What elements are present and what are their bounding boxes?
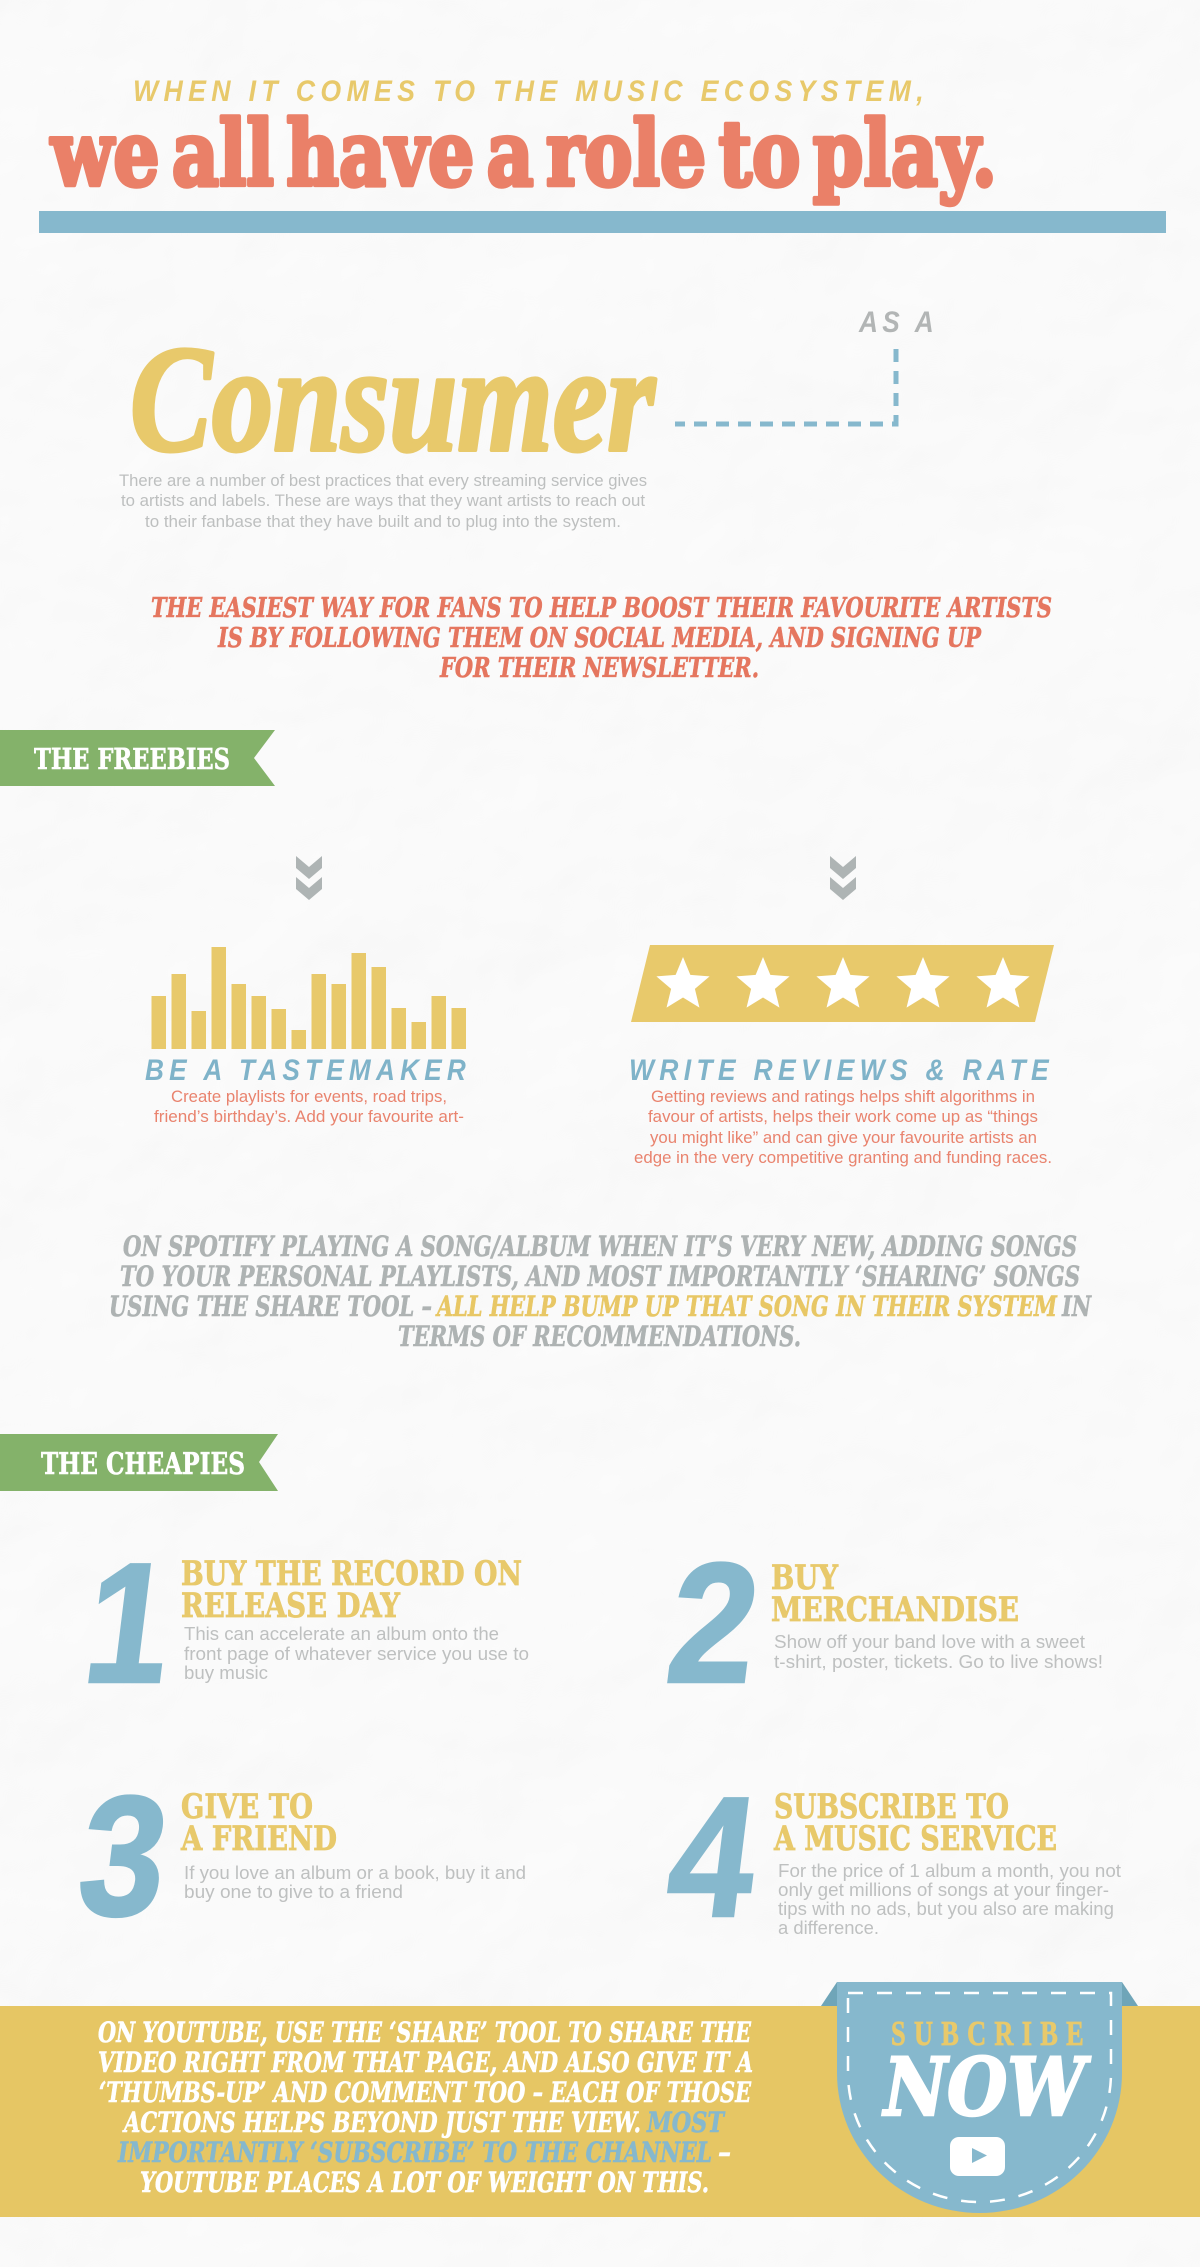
text: on youtube: [98, 2016, 753, 2199]
banner: the cheapies: THE CHEAPIES: [41, 1447, 245, 1482]
heading: buy the record: [181, 1554, 522, 1626]
heading: buy the record: RELEASE DAY: [181, 1586, 401, 1626]
text: on youtube: IMPORTANTLY ‘SUBSCRIBE’ TO THE CHANNEL: [117, 2136, 712, 2169]
panel: youtube band: [0, 1982, 1200, 2217]
body: reviews: favour of artists, helps their work come up as “things: [648, 1107, 1038, 1126]
callout: easiest way for fans: IS BY FOLLOWING THEM ON SOCIAL MEDIA, AND SIGNING UP: [217, 623, 982, 654]
heading: subscribe to a music service: [773, 1787, 1057, 1859]
heading: buy merchandise: [771, 1558, 1019, 1630]
body: tastemaker: Create playlists for events, road trips,: [171, 1087, 447, 1106]
heading: give to a friend: GIVE TO: [181, 1787, 313, 1827]
kicker: when it comes to the music ecosystem: WHEN IT COMES TO THE MUSIC ECOSYSTEM,: [133, 75, 929, 108]
intro paragraph: to their fanbase that they have built and to plug into the system.: [145, 512, 621, 531]
heading: give to a friend: [180, 1787, 337, 1859]
badge: subscribe now: NOW: [881, 2040, 1091, 2134]
intro paragraph: to artists and labels. These are ways that they want artists to reach out: [121, 491, 645, 510]
body: tip 4: tips with no ads, but you also are making: [778, 1898, 1114, 1919]
body: tip 1: [184, 1623, 529, 1683]
panel: tip 1: [75, 1529, 529, 1719]
icon: five stars: [631, 945, 1054, 1022]
text: on youtube: VIDEO RIGHT FROM THAT PAGE, AND ALSO GIVE IT A: [98, 2046, 753, 2079]
body: tip 2: t-shirt, poster, tickets. Go to live shows!: [774, 1651, 1103, 1672]
body: tastemaker: [154, 1087, 464, 1126]
heading: buy merchandise: BUY: [771, 1558, 839, 1598]
callout: easiest way for fans: [151, 593, 1052, 684]
dashed connector arrow: [675, 349, 896, 424]
body: tip 3: If you love an album or a book, buy it and: [184, 1862, 526, 1883]
body: tip 1: This can accelerate an album onto the: [184, 1623, 499, 1644]
body: tip 4: For the price of 1 album a month, you not: [778, 1860, 1121, 1881]
text: on youtube: YOUTUBE PLACES A LOT OF WEIGHT ON THIS.: [140, 2166, 709, 2199]
callout: on spotify: TERMS OF RECOMMENDATIONS.: [398, 1320, 801, 1353]
bar chart: equalizer: [152, 947, 466, 1049]
body: reviews: Getting reviews and ratings helps shift algorithms in: [651, 1087, 1035, 1106]
intro paragraph: There are a number of best practices that every streaming service gives: [119, 471, 647, 490]
heading: subscribe to a music service: A MUSIC SERVICE: [773, 1819, 1057, 1859]
label: as a: AS A: [858, 306, 938, 339]
icon: down chevrons: [296, 856, 322, 900]
badge: subscribe now: [821, 1982, 1138, 2213]
icon: down chevrons: [830, 856, 856, 900]
callout: easiest way for fans: FOR THEIR NEWSLETTER.: [439, 653, 759, 684]
panel: tip 2: [658, 1529, 1103, 1719]
heading: buy merchandise: MERCHANDISE: [771, 1590, 1019, 1630]
text: on youtube: MOST: [646, 2106, 726, 2139]
number 2: 2: [658, 1529, 769, 1719]
title: we all have a role to play.: [50, 101, 997, 207]
body: tip 4: [778, 1860, 1121, 1938]
number 4: 4: [658, 1763, 767, 1953]
body: tastemaker: friend’s birthday’s. Add your favourite art-: [154, 1107, 464, 1126]
panel: write reviews and rate: [629, 856, 1054, 1167]
text: on youtube: ACTIONS HELPS BEYOND JUST THE VIEW.: [122, 2106, 641, 2139]
heading: subscribe to a music service: SUBSCRIBE TO: [774, 1787, 1009, 1827]
text: on youtube: ON YOUTUBE, USE THE ‘SHARE’ TOOL TO SHARE THE: [98, 2016, 751, 2049]
callout: on spotify: [109, 1230, 1092, 1353]
panel: as a consumer: [119, 306, 938, 531]
body: tip 1: buy music: [184, 1662, 268, 1683]
heading: be a tastemaker: BE A TASTEMAKER: [145, 1054, 471, 1087]
callout: on spotify: USING THE SHARE TOOL –: [109, 1290, 432, 1323]
banner: the cheapies: [0, 1434, 278, 1491]
number 1: 1: [75, 1529, 182, 1719]
body: tip 2: Show off your band love with a sweet: [774, 1631, 1085, 1652]
body: tip 4: only get millions of songs at your finger-: [778, 1879, 1109, 1900]
icon: youtube play: [950, 2137, 1005, 2176]
body: reviews: [634, 1087, 1052, 1167]
body: tip 1: front page of whatever service you use to: [184, 1643, 529, 1664]
panel: be a tastemaker: [145, 856, 471, 1126]
number 3: 3: [69, 1762, 178, 1952]
body: tip 3: [184, 1862, 526, 1902]
heading: give to a friend: A FRIEND: [180, 1819, 337, 1859]
callout: on spotify: IN: [1061, 1290, 1092, 1323]
banner: the freebies: [0, 730, 275, 786]
panel: tip 4: [658, 1763, 1121, 1953]
text: on youtube: ‘THUMBS-UP’ AND COMMENT TOO – EACH OF THOSE: [99, 2076, 751, 2109]
yellow band: [0, 2006, 1200, 2217]
heading: write reviews and rate: WRITE REVIEWS & RATE: [629, 1054, 1054, 1087]
intro paragraph: [119, 471, 647, 531]
badge: subscribe now: SUBCRIBE: [891, 2014, 1092, 2053]
heading: buy the record: BUY THE RECORD ON: [181, 1554, 522, 1594]
title rule bar: [39, 211, 1166, 233]
body: tip 2: [774, 1631, 1103, 1672]
heading: consumer: Consumer: [130, 315, 656, 483]
body: tip 3: buy one to give to a friend: [184, 1881, 403, 1902]
text: on youtube: –: [718, 2136, 731, 2169]
body: reviews: you might like” and can give your favourite artists an: [650, 1128, 1037, 1147]
body: reviews: edge in the very competitive granting and funding races.: [634, 1148, 1052, 1167]
body: tip 4: a difference.: [778, 1917, 879, 1938]
panel: tip 3: [69, 1762, 526, 1952]
banner: the freebies: THE FREEBIES: [34, 742, 230, 776]
